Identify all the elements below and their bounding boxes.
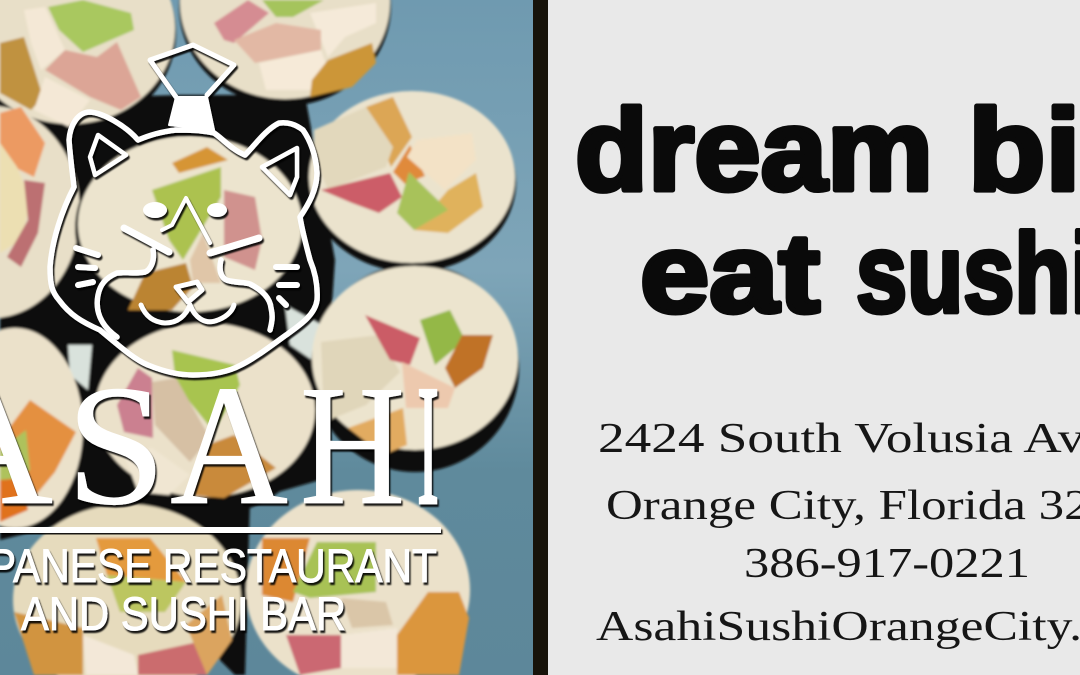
city and state: Orange City, Florida 32763 <box>606 483 1080 529</box>
right whiskers <box>276 267 297 305</box>
logo: cat mascot outline <box>50 45 317 375</box>
letter S: S <box>66 351 166 541</box>
left eye <box>143 202 167 218</box>
street address: 2424 South Volusia Ave <box>598 416 1080 462</box>
roll: right lower <box>311 264 519 472</box>
letter H: H <box>300 351 405 541</box>
roll: left middle <box>0 106 80 318</box>
roll: left lower <box>0 328 83 528</box>
plate background <box>0 0 533 675</box>
right ear inner <box>262 148 297 195</box>
phone number: 386-917-0221 <box>744 541 1030 587</box>
left whiskers <box>76 248 98 285</box>
address text block <box>596 416 1080 650</box>
divider bar <box>533 0 548 675</box>
roll: center lower <box>248 490 280 510</box>
roll: top center <box>179 0 391 106</box>
cat head outline <box>50 112 317 375</box>
cat neck <box>169 97 214 130</box>
logo: ASAHI wordmark <box>0 388 440 509</box>
logo: tagline line two: AND SUSHI BAR <box>21 587 346 640</box>
cat left cheek <box>97 250 153 337</box>
heading: dream big <box>575 85 1080 215</box>
panel: right background <box>533 0 1080 675</box>
sushi rolls <box>0 0 519 675</box>
panel: sushi photo <box>0 0 533 675</box>
cat topknot <box>150 45 234 97</box>
word: dream: dream <box>575 85 933 215</box>
website: AsahiSushiOrangeCity.com <box>596 604 1080 650</box>
cat muzzle <box>141 282 234 323</box>
plate glare <box>68 305 322 390</box>
cat eyes <box>143 202 227 218</box>
left ear inner <box>90 135 126 175</box>
roll: bottom right <box>246 490 470 675</box>
letter A: A <box>170 351 288 541</box>
roll: bottom center <box>13 504 241 675</box>
roll: top left <box>0 12 178 107</box>
left brow whisker <box>124 228 169 252</box>
roll: right upper <box>308 92 516 272</box>
roll: center (behind cat) <box>74 139 232 314</box>
dark shadow between rolls <box>0 95 335 675</box>
right brow whisker <box>210 238 259 253</box>
heading: eat sushi <box>640 211 1080 336</box>
word: eat: eat <box>640 211 820 336</box>
logo: rule line <box>0 527 441 533</box>
cat right cheek <box>220 260 272 330</box>
right eye <box>207 203 227 217</box>
panel: sushi photo: I <box>417 351 439 541</box>
cat nose bridge <box>162 198 210 243</box>
